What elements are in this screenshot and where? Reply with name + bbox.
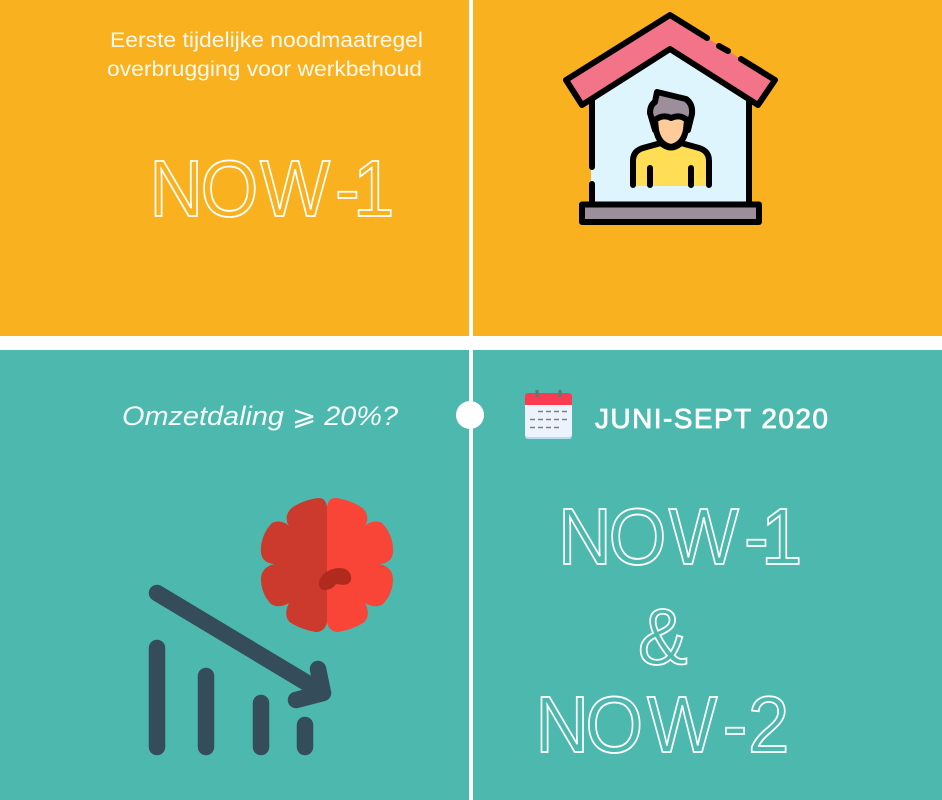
- person: [633, 92, 709, 186]
- icon: declining bar chart: [157, 593, 323, 747]
- heading: NOW-1: NOW-1: [149, 145, 394, 234]
- subtitle text: overbrugging voor werkbehoud: [107, 58, 422, 81]
- panel: bottom left: [0, 350, 469, 800]
- heading: NOW-1: NOW-1: [558, 493, 802, 582]
- icon: calendar: [525, 390, 572, 439]
- subtitle text: Eerste tijdelijke noodmaatregel: [110, 29, 423, 52]
- panel: bottom right: [473, 350, 942, 800]
- icon: house with person: [566, 15, 775, 222]
- subtitle text: [107, 29, 423, 81]
- heading: NOW-2: NOW-2: [535, 681, 789, 770]
- timeline dot: [456, 401, 484, 429]
- icon: virus: [261, 498, 393, 632]
- ampersand: &: [638, 593, 688, 682]
- question text: Omzetdaling ⩾ 20%?: [122, 401, 398, 431]
- panel: top right: [473, 0, 942, 336]
- panel: top left: [0, 0, 469, 336]
- date label: JUNI-SEPT 2020: [595, 403, 828, 434]
